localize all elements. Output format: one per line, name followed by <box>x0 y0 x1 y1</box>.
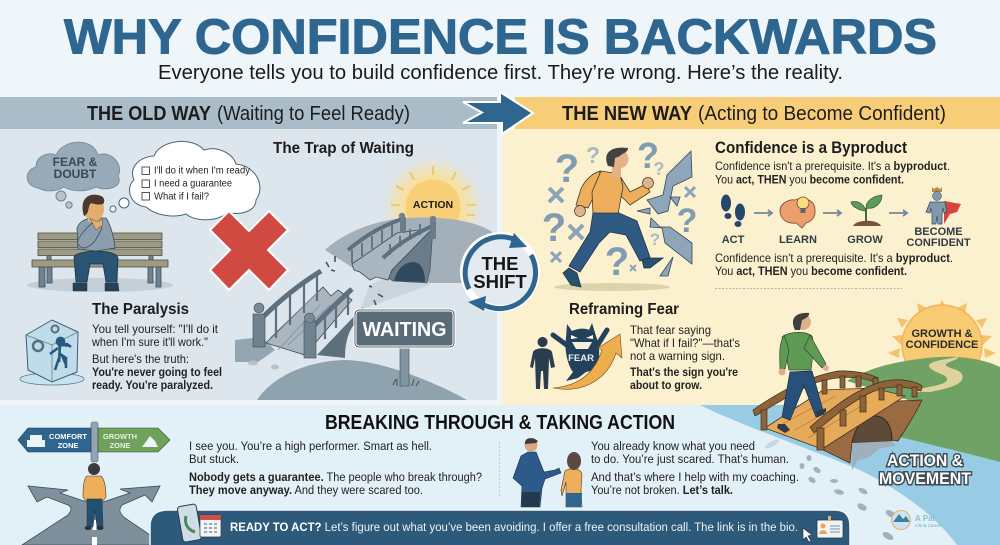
label: action and movement <box>879 452 971 488</box>
text: you already know: You already know what you need <box>591 439 755 453</box>
old way header: (Waiting to Feel Ready) <box>217 103 410 125</box>
illustration: growth sun <box>888 300 996 385</box>
text: the paralysis: when I'm sure it'll work." <box>91 335 208 349</box>
callout: ready to act <box>150 504 850 545</box>
text: you already know: to do. You’re just scared. That’s human. <box>591 452 789 466</box>
text: the paralysis <box>91 301 222 392</box>
icon: person facing fear monster <box>530 323 622 389</box>
logo watermark: Life & Career <box>915 523 942 528</box>
text: i see you <box>189 439 482 497</box>
illustration: running man breaking through: ? <box>637 135 659 176</box>
illustration: running man breaking through <box>542 135 697 291</box>
illustration: running man breaking through: ? <box>650 230 660 249</box>
water and river <box>700 405 1000 545</box>
badge: the shift <box>460 232 540 312</box>
subtitle: Everyone tells you to build confidence first. They’re wrong. Here’s the reality. <box>158 61 843 84</box>
text: byproduct explanation top: You act, THEN you become confident. <box>715 172 904 186</box>
signpost: ZONE <box>110 441 130 450</box>
flow: act learn grow become confident: ACT <box>722 234 745 246</box>
icon: footprints <box>721 194 745 227</box>
text: reframing fear copy: That's the sign you're <box>630 365 738 379</box>
text: you already know: And that’s where I help with my coaching. <box>591 470 799 484</box>
heading: breaking through and taking action: BREAKING THROUGH & TAKING ACTION <box>325 412 675 434</box>
text: i see you: Nobody gets a guarantee. The people who break through? <box>189 470 482 484</box>
logo watermark: A Pat <box>915 514 935 523</box>
text: byproduct explanation bottom: Confidence isn't a prerequisite. It's a byproduct. <box>715 251 953 265</box>
cloud: fear and doubt <box>27 142 120 208</box>
old way header: THE OLD WAY <box>87 103 212 125</box>
icon: id card <box>817 516 843 538</box>
text: the paralysis: You're never going to feel <box>92 365 222 379</box>
old way header <box>0 97 497 129</box>
icon: phone and calendar <box>177 504 221 542</box>
icon: person facing fear monster: FEAR <box>568 353 594 364</box>
illustration: action sun: ACTION <box>413 199 453 211</box>
icon: frozen figure in ice <box>20 320 84 385</box>
text: reframing fear copy: about to grow. <box>630 378 702 392</box>
signpost: COMFORT <box>49 432 87 441</box>
text: i see you: I see you. You’re a high performer. Smart as hell. <box>189 439 432 453</box>
badge: the shift: THE <box>482 253 518 274</box>
illustration: action sun <box>383 157 483 257</box>
text: you already know <box>591 439 799 497</box>
illustration: crossroads <box>18 422 170 545</box>
illustration: running man breaking through: ? <box>677 202 697 240</box>
icon: caped hero <box>926 187 961 224</box>
heading: the trap of waiting: The Trap of Waiting <box>273 140 414 157</box>
callout: ready to act: READY TO ACT? Let’s figure out what you’ve been avoiding. I offer a free consultation call. The link is in the bio. <box>230 520 798 534</box>
badge: the shift: SHIFT <box>473 271 527 292</box>
illustration: growth sun: CONFIDENCE <box>906 339 978 351</box>
text: the paralysis: The Paralysis <box>92 301 189 318</box>
illustration: running man breaking through: ? <box>586 142 600 168</box>
text: you already know: You’re not broken. Let’s talk. <box>591 483 733 497</box>
text: reframing fear copy: "What if I fail?"—that's <box>630 336 740 350</box>
text: reframing fear copy: That fear saying <box>630 323 711 337</box>
icon: sprout <box>851 195 882 226</box>
thought bubble: checklist: I'll do it when I'm ready <box>154 166 250 176</box>
label: action and movement: MOVEMENT <box>879 470 971 488</box>
illustration: running man breaking through: ? <box>555 147 579 191</box>
flow: act learn grow become confident: LEARN <box>779 234 817 246</box>
signpost: GROWTH <box>103 432 137 441</box>
illustration: man on bench <box>27 195 173 292</box>
illustration: wooden bridge <box>753 313 922 470</box>
icon: cursor <box>803 528 812 542</box>
signpost: ZONE <box>58 441 78 450</box>
figure: person at fork <box>83 463 106 530</box>
flow: act learn grow become confident: CONFIDENT <box>906 237 971 249</box>
cloud: fear and doubt: DOUBT <box>54 167 97 181</box>
new way header <box>515 97 1000 129</box>
red x mark <box>210 211 288 290</box>
text: byproduct explanation top: Confidence isn't a prerequisite. It's a byproduct. <box>715 159 950 173</box>
illustration: running man breaking through: ? <box>605 240 629 284</box>
flow: act learn grow become confident: GROW <box>847 234 883 246</box>
illustration: running man breaking through: ? <box>542 206 566 250</box>
illustration: growth sun: GROWTH & <box>911 328 973 340</box>
arrow: old to new <box>463 92 533 134</box>
heading: confidence is a byproduct: Confidence is a Byproduct <box>715 139 907 157</box>
heading: reframing fear: Reframing Fear <box>569 301 679 318</box>
text: i see you: They move anyway. And they were scared too. <box>189 483 423 497</box>
text: byproduct explanation bottom: You act, THEN you become confident. <box>715 264 907 278</box>
flow: act learn grow become confident: BECOME <box>914 226 963 238</box>
section: breaking through background <box>0 405 1000 545</box>
flow: act learn grow become confident <box>721 187 971 249</box>
signpost <box>18 422 170 462</box>
thought bubble: checklist: I need a guarantee <box>154 178 232 190</box>
label: action and movement: ACTION & <box>887 452 963 470</box>
icon: brain and bulb <box>780 197 815 228</box>
new way header: THE NEW WAY <box>562 103 693 125</box>
panel: new way <box>502 97 1000 405</box>
text: byproduct explanation bottom <box>715 251 953 278</box>
sign: waiting <box>355 310 454 386</box>
text: the paralysis: ready. You're paralyzed. <box>92 378 213 392</box>
sign: waiting: WAITING <box>362 319 446 341</box>
figure: man walking <box>777 313 829 433</box>
logo watermark <box>892 510 942 530</box>
footprints on path <box>764 438 898 542</box>
text: the paralysis: But here's the truth: <box>92 352 189 366</box>
text: reframing fear copy <box>630 323 740 392</box>
text: byproduct explanation top <box>715 159 950 186</box>
cloud: fear and doubt: FEAR & <box>53 155 98 169</box>
illustration: broken bridge <box>235 213 497 400</box>
text: i see you: But stuck. <box>189 452 239 466</box>
illustration: running man breaking through: ? <box>654 159 664 179</box>
text: reframing fear copy: not a warning sign. <box>630 349 725 363</box>
title: WHY CONFIDENCE IS BACKWARDS <box>64 10 937 64</box>
illustration: coach and client <box>513 438 582 507</box>
panel: old way <box>0 97 497 400</box>
illustration: green hill and path <box>847 357 1000 462</box>
text: the paralysis: You tell yourself: "I'll do it <box>92 322 219 336</box>
new way header: (Acting to Become Confident) <box>698 103 946 125</box>
thought bubble: checklist <box>110 141 260 220</box>
thought bubble: checklist: What if I fail? <box>154 192 209 202</box>
